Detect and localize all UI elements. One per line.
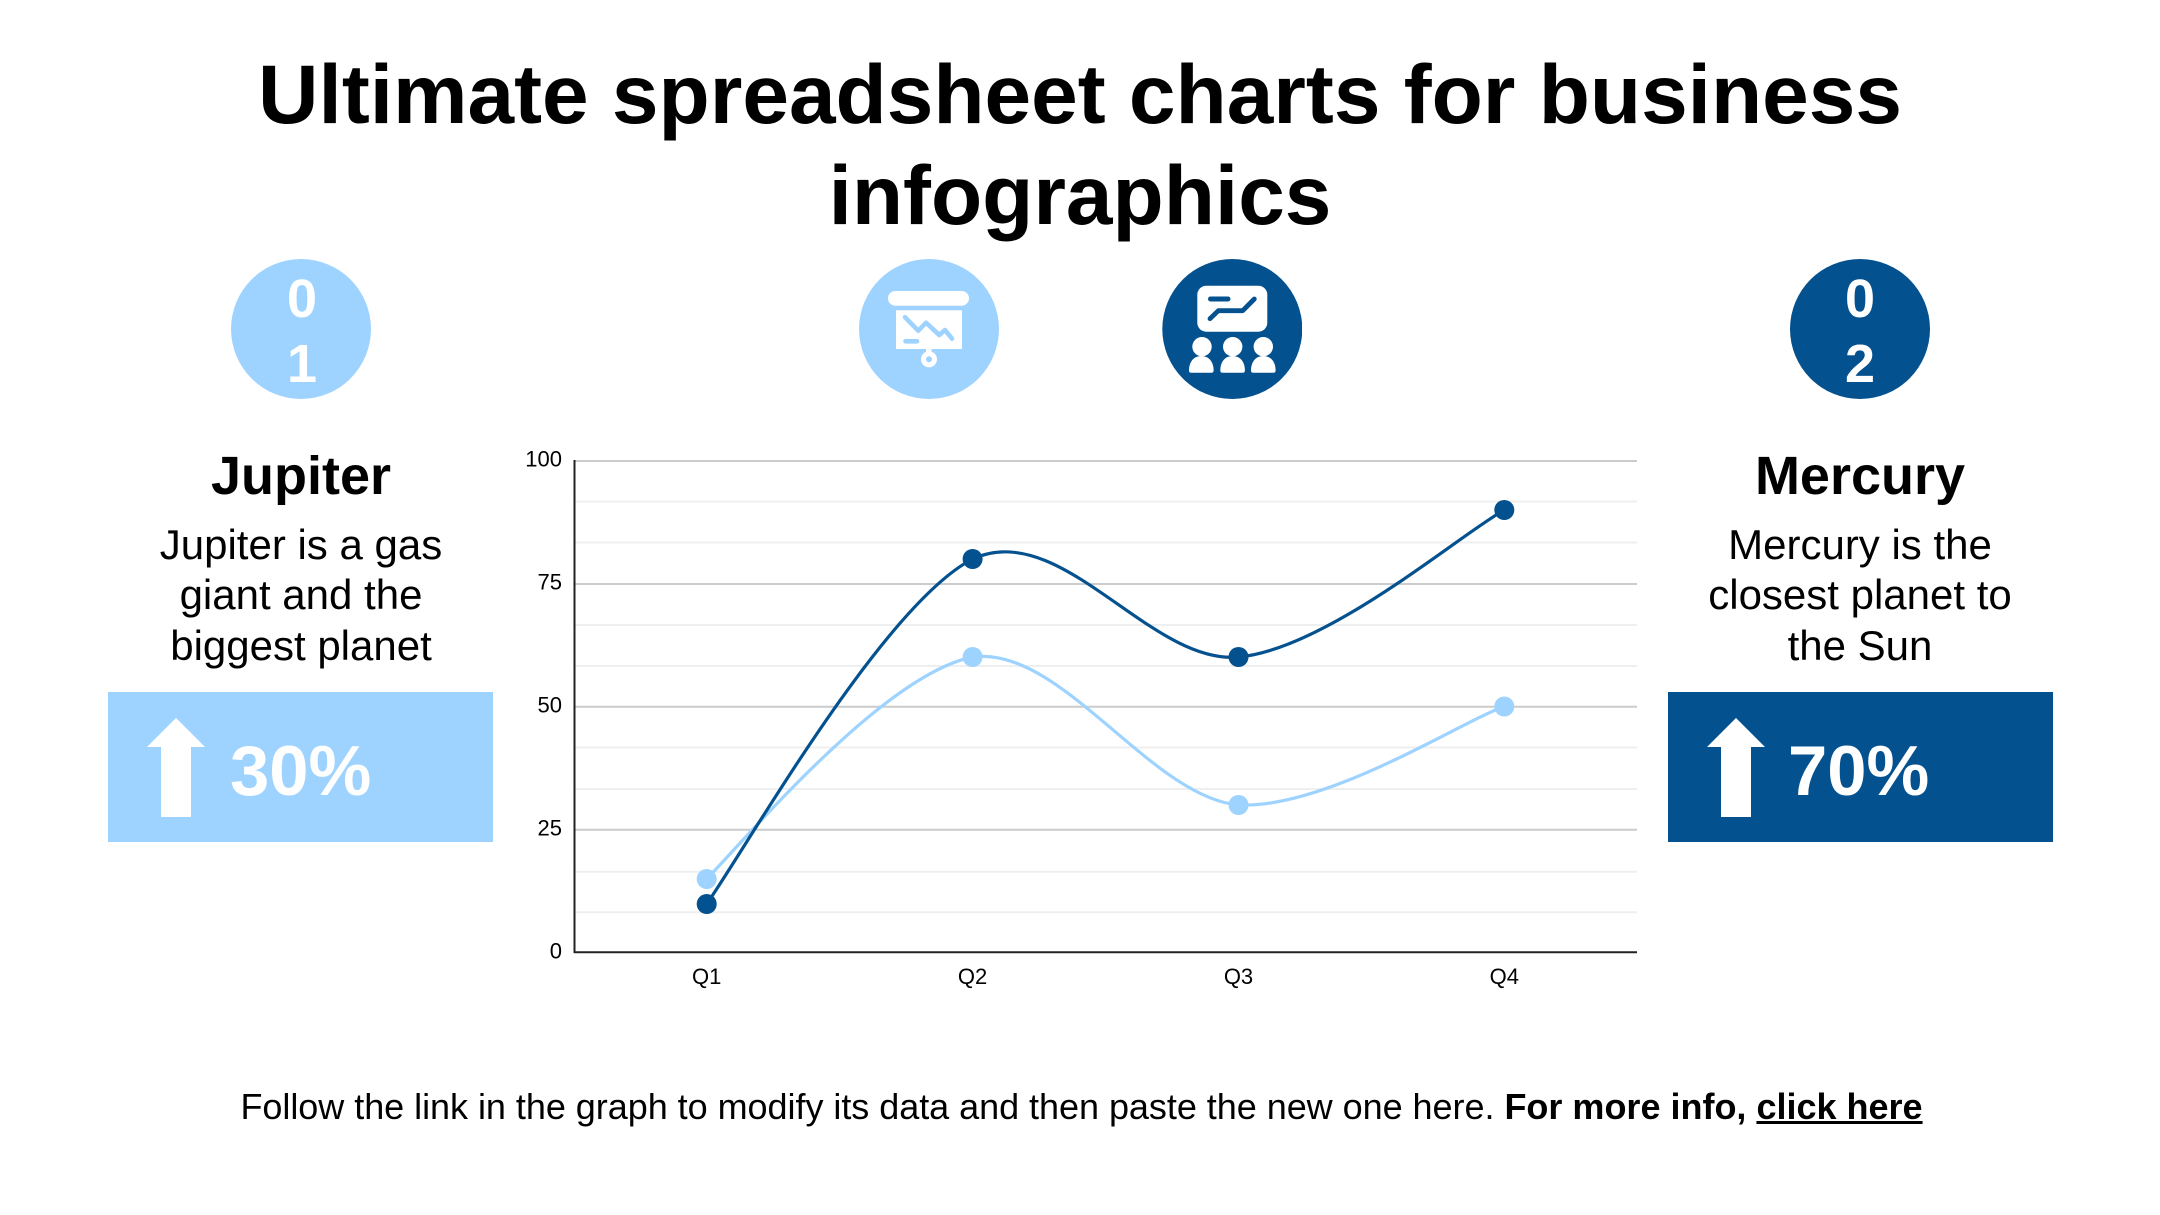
line chart	[525, 446, 1637, 989]
y axis labels: 100	[525, 446, 562, 472]
heading: Jupiter: Jupiter	[211, 446, 391, 506]
x axis labels	[692, 964, 1519, 989]
number badge 02	[1790, 259, 1930, 399]
series: light blue	[697, 647, 1514, 889]
x axis labels: Q1	[692, 964, 721, 989]
stat value: 70%	[1788, 731, 1929, 810]
x axis labels: Q3	[1224, 964, 1253, 989]
number badge 01	[231, 259, 371, 399]
description: Jupiter: giant and the	[180, 571, 422, 618]
heading: Mercury: Mercury	[1755, 446, 1965, 506]
y axis labels: 25	[538, 816, 562, 840]
description: Jupiter: biggest planet	[170, 622, 432, 669]
description: Jupiter	[160, 521, 442, 669]
series: dark blue	[697, 500, 1514, 914]
panel: Jupiter	[108, 259, 493, 842]
x axis labels: Q2	[958, 964, 987, 989]
y axis labels: 75	[538, 570, 562, 594]
x axis labels: Q4	[1490, 964, 1519, 989]
description: Mercury: the Sun	[1788, 622, 1932, 669]
stat box: 70%	[1668, 692, 2053, 842]
panel: Mercury	[1668, 259, 2053, 842]
stat box: 30%	[108, 692, 493, 842]
icon: presentation board	[859, 259, 999, 399]
y axis labels: 50	[538, 692, 562, 718]
footer note: Follow the link in the graph to modify its data and then paste the new one here. For more info, click here	[240, 1086, 1923, 1127]
description: Jupiter: Jupiter is a gas	[160, 521, 442, 568]
badge number: 1	[287, 334, 317, 394]
badge number: 0	[287, 269, 317, 329]
badge number: 0	[1845, 269, 1875, 329]
description: Mercury	[1708, 521, 2012, 669]
title	[258, 47, 1902, 242]
stat value: 30%	[230, 731, 371, 810]
description: Mercury: Mercury is the	[1728, 521, 1992, 568]
icon: audience and screen	[1162, 259, 1302, 399]
badge number	[1845, 269, 1875, 394]
y axis labels	[525, 446, 562, 964]
badge number	[287, 269, 317, 394]
y axis labels: 0	[550, 938, 562, 964]
title: infographics	[829, 148, 1331, 242]
icon: up arrow	[147, 718, 205, 817]
icon: up arrow	[1707, 718, 1765, 817]
badge number: 2	[1845, 334, 1875, 394]
description: Mercury: closest planet to	[1708, 571, 2012, 618]
title: Ultimate spreadsheet charts for business	[258, 47, 1902, 141]
